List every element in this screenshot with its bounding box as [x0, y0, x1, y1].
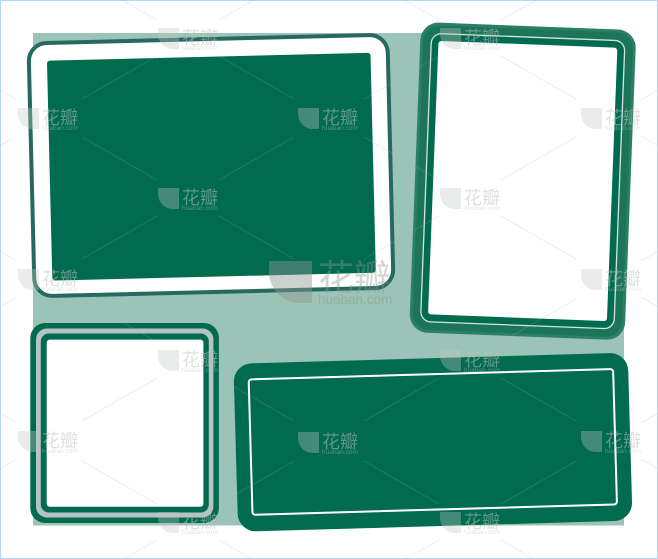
panel: bottom-left frame	[30, 323, 219, 523]
white outline	[249, 369, 617, 515]
green fill	[47, 53, 376, 281]
watermark	[18, 108, 78, 132]
watermark: huaban.com	[464, 205, 500, 212]
watermark	[298, 432, 358, 456]
watermark	[440, 188, 500, 212]
watermark	[158, 188, 218, 212]
background panel	[33, 33, 624, 526]
outer band	[30, 323, 219, 523]
watermark: huaban.com	[322, 125, 358, 132]
watermark	[18, 269, 78, 293]
watermark: huaban.com	[182, 205, 218, 212]
watermark: 花瓣	[464, 512, 500, 532]
watermark: 花瓣	[322, 432, 358, 452]
watermark	[158, 512, 218, 536]
watermark: 花瓣	[42, 431, 78, 451]
white interior	[428, 41, 617, 321]
panel: top-right frame	[409, 22, 636, 340]
large watermark: huaban.com	[318, 292, 392, 307]
watermark: 花瓣	[605, 108, 641, 128]
watermark	[298, 108, 358, 132]
watermark	[18, 431, 78, 455]
watermark: huaban.com	[182, 367, 218, 374]
panel: bottom-right frame	[233, 353, 633, 532]
watermark	[440, 28, 500, 52]
watermark: huaban.com	[464, 529, 500, 536]
green fill	[233, 353, 633, 532]
large watermark	[269, 257, 392, 307]
watermark	[581, 108, 641, 132]
watermark: huaban.com	[464, 45, 500, 52]
large watermark: 花瓣	[318, 257, 390, 298]
watermark: 花瓣	[182, 512, 218, 532]
watermark: huaban.com	[42, 125, 78, 132]
watermark: huaban.com	[464, 367, 500, 374]
gray band	[36, 328, 213, 518]
panel: top-left frame	[28, 35, 394, 296]
outer band	[409, 22, 636, 340]
middle band	[412, 25, 633, 337]
watermark: 花瓣	[42, 269, 78, 289]
watermark: huaban.com	[182, 529, 218, 536]
watermark: 花瓣	[42, 108, 78, 128]
watermark: huaban.com	[605, 286, 641, 293]
thin line	[421, 33, 625, 329]
inner band	[41, 334, 209, 512]
frame outline	[28, 35, 394, 296]
white interior	[47, 340, 203, 507]
watermark: 花瓣	[182, 188, 218, 208]
watermark	[440, 350, 500, 374]
watermark	[581, 431, 641, 455]
watermark: huaban.com	[605, 448, 641, 455]
watermark: huaban.com	[322, 449, 358, 456]
watermark	[158, 350, 218, 374]
watermark: 花瓣	[464, 350, 500, 370]
watermark: 花瓣	[464, 188, 500, 208]
watermark: 花瓣	[322, 108, 358, 128]
watermark: 花瓣	[605, 269, 641, 289]
watermark: huaban.com	[605, 125, 641, 132]
watermark: huaban.com	[182, 45, 218, 52]
watermark: 花瓣	[605, 431, 641, 451]
watermark: huaban.com	[42, 448, 78, 455]
watermark: 花瓣	[182, 350, 218, 370]
watermark: 花瓣	[182, 28, 218, 48]
watermark: 花瓣	[464, 28, 500, 48]
watermark	[581, 269, 641, 293]
watermark	[440, 512, 500, 536]
watermark	[158, 28, 218, 52]
watermark: huaban.com	[42, 286, 78, 293]
